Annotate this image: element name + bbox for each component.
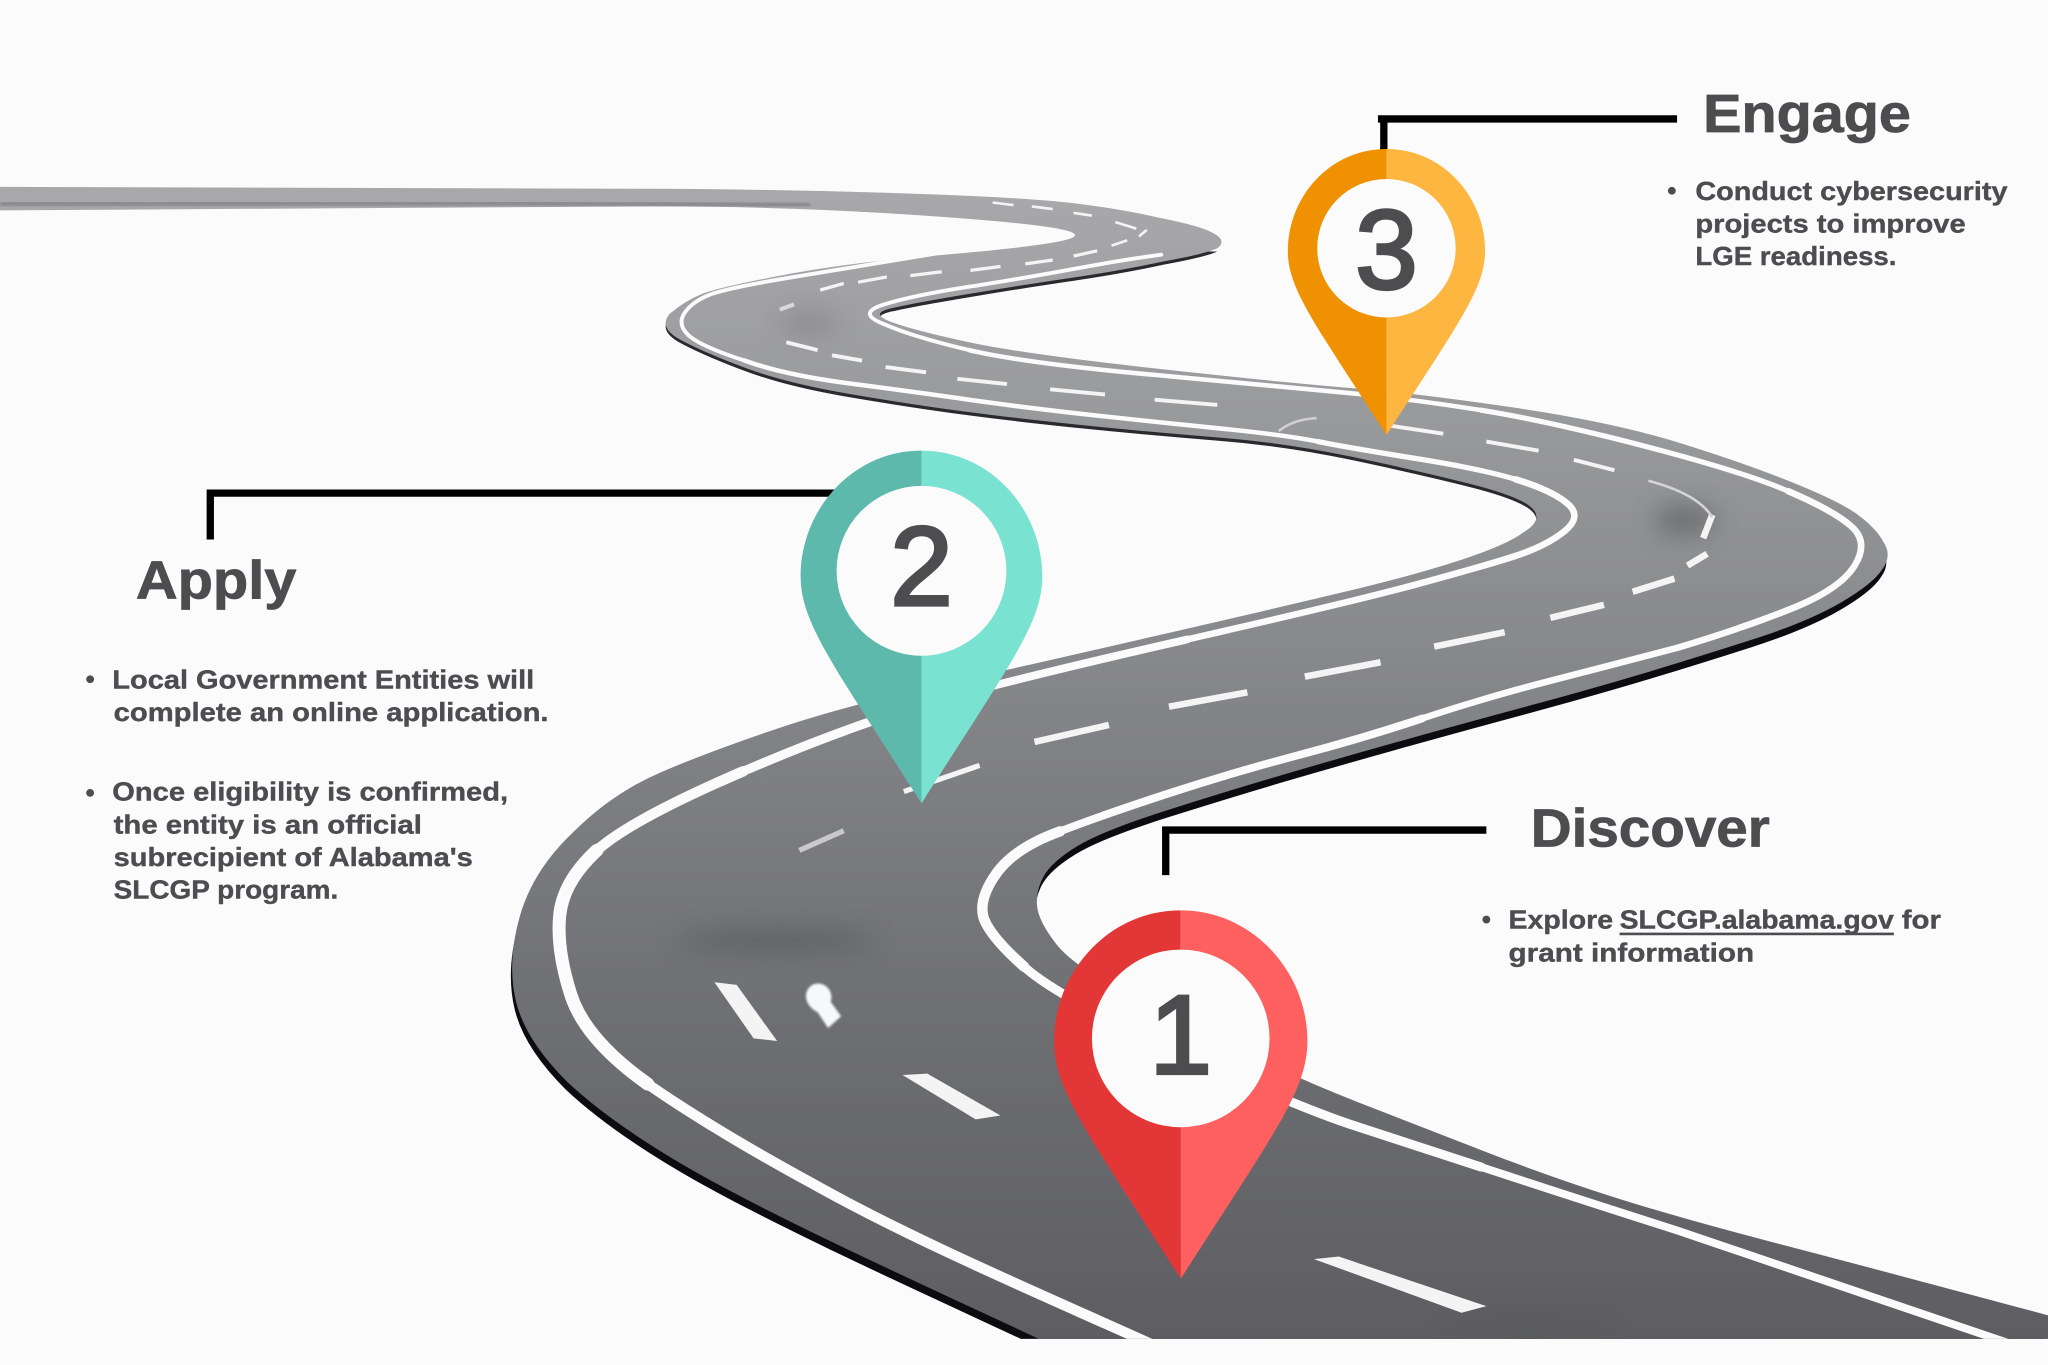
road smudges xyxy=(698,310,1720,954)
pin 2: teal xyxy=(801,451,1042,803)
pin 1: red xyxy=(1054,910,1307,1279)
text block: Discover xyxy=(1482,905,1941,967)
connector: step 1 xyxy=(1166,830,1486,875)
heading: Discover: Discover xyxy=(1531,799,1770,858)
road glare spot xyxy=(806,983,841,1028)
text block: Discover: grant information xyxy=(1509,937,1754,967)
text block: Engage: LGE readiness. xyxy=(1695,241,1896,271)
text block: Discover: SLCGP.alabama.gov xyxy=(1620,905,1894,935)
text block: Apply: subrecipient of Alabama's xyxy=(114,842,473,872)
text block: Apply: Once eligibility is confirmed, xyxy=(112,777,508,807)
centre dashes xyxy=(780,202,1712,850)
right edge line xyxy=(870,255,2008,1343)
text block: Apply: SLCGP program. xyxy=(114,875,338,905)
pin 3: orange xyxy=(1288,149,1485,435)
pin 1: red: 1 xyxy=(1150,972,1212,1098)
text block: Apply xyxy=(86,664,549,905)
connector: step 3 xyxy=(1378,119,1677,152)
road shadow edge, foreground xyxy=(510,562,2046,1339)
foreground dashes xyxy=(714,982,1486,1313)
pin 2: teal: 2 xyxy=(890,503,953,629)
horizon stretch of road xyxy=(0,203,810,205)
text block: Apply: the entity is an official xyxy=(114,809,422,839)
connector: step 2 xyxy=(210,493,836,539)
text block: Engage: projects to improve xyxy=(1695,209,1966,239)
heading: Engage: Engage xyxy=(1703,85,1911,144)
text block: Apply: complete an online application. xyxy=(114,697,549,727)
text block: Discover: for xyxy=(1902,905,1941,935)
left edge line xyxy=(559,235,1574,1348)
pin 3: orange: 3 xyxy=(1355,187,1418,313)
text block: Discover: Explore xyxy=(1509,905,1613,935)
text block: Engage xyxy=(1668,176,2008,271)
text block: Apply: Local Government Entities will xyxy=(112,664,534,694)
road shadow edge, upper stretch xyxy=(666,252,1536,519)
text block: Engage: Conduct cybersecurity xyxy=(1695,176,2008,206)
heading: Apply: Apply xyxy=(136,551,297,610)
